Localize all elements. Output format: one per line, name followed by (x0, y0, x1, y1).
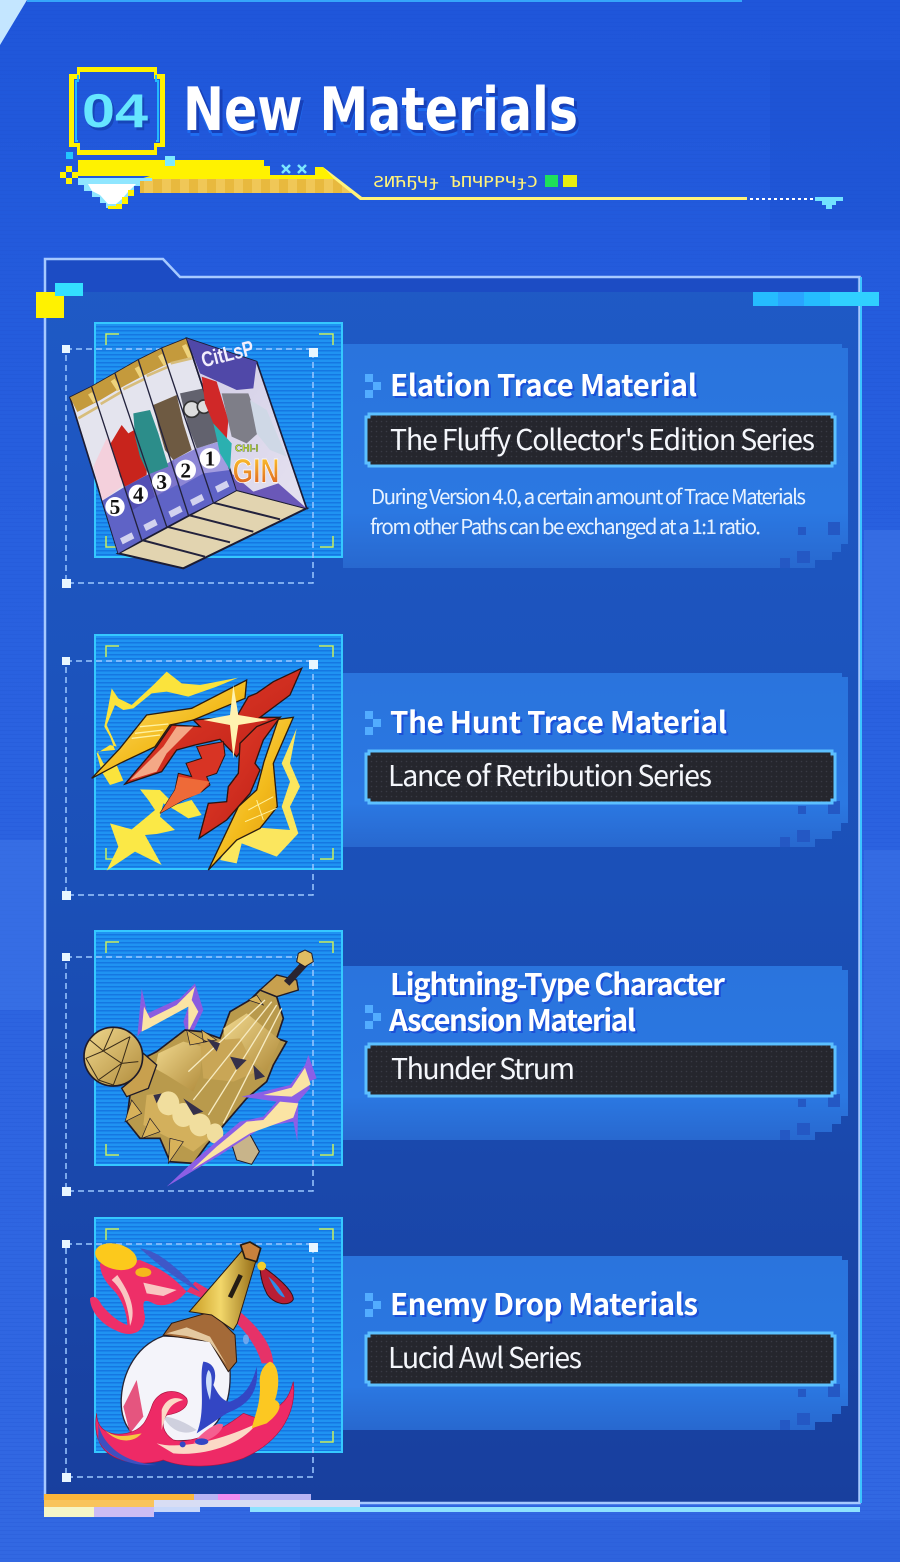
heading: Enemy Drop Materials (390, 1282, 698, 1324)
name bar (366, 1333, 835, 1385)
icon: thunder strum (84, 950, 317, 1187)
section number badge (69, 67, 165, 155)
row 1 band (343, 344, 848, 568)
row 4 text (365, 1282, 835, 1385)
icon: fluffy collector's edition box set: 2 (180, 458, 191, 482)
image frame 3 (62, 931, 342, 1196)
note: During Version 4.0, a certain amount of Trace Materials (371, 480, 806, 510)
icon: fluffy collector's edition box set: 3 (156, 470, 167, 494)
image frame 2 (62, 635, 342, 900)
heading: Ascension Material (388, 998, 636, 1040)
image frame 4 (62, 1218, 342, 1482)
name: Lance of Retribution Series (388, 754, 712, 795)
name: Thunder Strum (391, 1047, 575, 1088)
header micro text: ƧИЋҔЧɟ ЪПЧPPЧɟƆ (373, 173, 538, 191)
icon: fluffy collector's edition box set: 5 (110, 495, 120, 519)
name bar (366, 414, 835, 466)
colour pixel strip (44, 1494, 860, 1517)
heading: Elation Trace Material (390, 363, 697, 405)
icon: fluffy collector's edition box set: CHI-I (235, 444, 259, 455)
bullet (365, 1293, 381, 1317)
icon: fluffy collector's edition box set: CitLsP (199, 336, 256, 372)
row 2 text (365, 700, 835, 803)
header ornament (60, 152, 843, 209)
icon: fluffy collector's edition box set (70, 336, 307, 568)
header micro text (373, 173, 577, 191)
bullet (365, 1005, 381, 1029)
image frame 1 (62, 323, 342, 588)
name bar (366, 751, 835, 803)
icon: fluffy collector's edition box set: 1 (205, 447, 215, 471)
icon: fluffy collector's edition box set: GIN (233, 453, 279, 491)
name: The Fluffy Collector's Edition Series (390, 418, 815, 459)
row 1 text (365, 363, 835, 540)
bullet (365, 711, 381, 735)
bullet (365, 374, 381, 398)
icon: lucid awl brush (90, 1239, 294, 1466)
main panel frame (36, 258, 879, 1503)
row 3 text (365, 962, 835, 1096)
note (370, 480, 806, 540)
icon: fluffy collector's edition box set: 4 (133, 483, 144, 507)
heading: The Hunt Trace Material (390, 700, 727, 742)
name bar (366, 1044, 835, 1096)
icon: lance of retribution (92, 668, 302, 871)
name: Lucid Awl Series (388, 1336, 582, 1377)
row 2 band (343, 673, 848, 847)
row 4 band (343, 1256, 848, 1430)
note: from other Paths can be exchanged at a 1:1 ratio. (370, 510, 761, 540)
heading (388, 962, 725, 1040)
title: New Materials (183, 75, 578, 145)
heading: Lightning-Type Character (390, 962, 725, 1004)
row 3 band (343, 966, 848, 1140)
section number badge: 04 (82, 84, 148, 137)
